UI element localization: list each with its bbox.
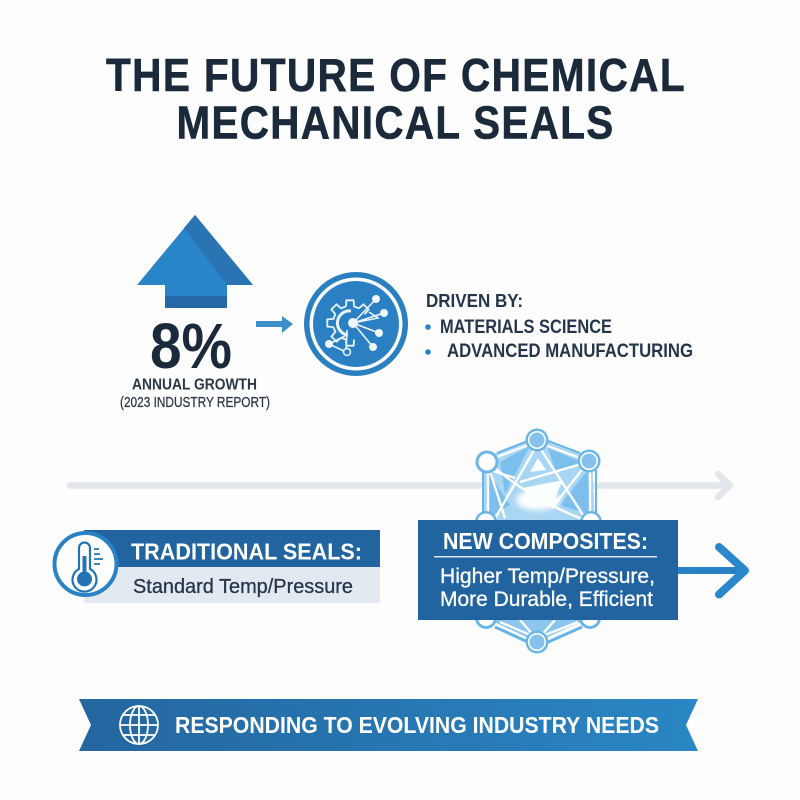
panel: traditional seals [84, 530, 380, 603]
growth statistic: 8% [150, 310, 232, 382]
panel: traditional seals: Standard Temp/Pressure [133, 576, 353, 598]
arrow: forward from new composites [676, 547, 745, 594]
drivers list [425, 290, 693, 362]
panel: new composites: More Durable, Efficient [440, 588, 653, 611]
growth statistic: (2023 INDUSTRY REPORT) [120, 395, 270, 411]
panel: traditional seals: TRADITIONAL SEALS: [131, 538, 362, 564]
lattice nodes [475, 428, 602, 654]
drivers list: DRIVEN BY: [426, 290, 523, 311]
arrow: growth to drivers [256, 316, 293, 333]
growth statistic: ANNUAL GROWTH [132, 376, 257, 394]
icon: composite lattice [475, 428, 602, 654]
panel: new composites: NEW COMPOSITES: [443, 528, 648, 554]
timeline arrow [70, 474, 730, 497]
growth statistic [120, 310, 270, 411]
title [106, 49, 686, 148]
drivers list: ADVANCED MANUFACTURING [447, 341, 693, 362]
title: THE FUTURE OF CHEMICAL [106, 49, 686, 101]
drivers list: MATERIALS SCIENCE [440, 317, 612, 338]
panel: new composites: Higher Temp/Pressure, [440, 565, 655, 588]
banner: evolving industry needs: RESPONDING TO EVOLVING INDUSTRY NEEDS [175, 712, 659, 738]
panel: new composites [418, 520, 678, 620]
icon: growth up arrow [137, 215, 253, 308]
banner: evolving industry needs [79, 699, 698, 751]
icon: thermometer [54, 533, 116, 595]
icon: gear and network circle [304, 272, 408, 376]
title: MECHANICAL SEALS [176, 96, 614, 148]
icon: globe [120, 706, 158, 744]
